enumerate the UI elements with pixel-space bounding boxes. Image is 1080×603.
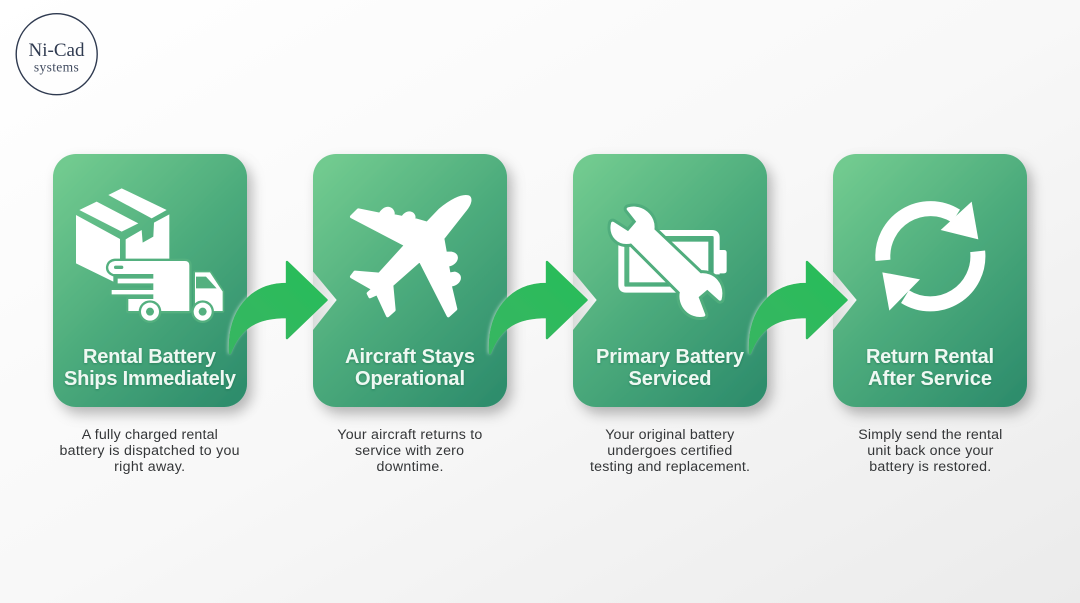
- text block: step 3 description: undergoes certified: [607, 443, 732, 459]
- panel: step 4 return rental after service: [833, 154, 1027, 407]
- text block: step 1 description: battery is dispatched to you: [60, 443, 240, 459]
- arrow: step 1 to step 2: [230, 262, 337, 353]
- text block: step 1 description: right away.: [114, 459, 185, 475]
- text block: step 2 description: downtime.: [376, 459, 444, 475]
- heading: step 3: Primary Battery: [596, 346, 745, 368]
- heading: step 3: Serviced: [628, 368, 712, 390]
- heading: step 2: Aircraft Stays: [345, 346, 475, 368]
- panel: step 3 primary battery serviced: [573, 154, 767, 407]
- heading: step 4: After Service: [868, 368, 992, 390]
- text block: step 3 description: Your original battery: [605, 427, 735, 443]
- arrow: step 3 to step 4: [750, 262, 857, 353]
- heading: step 1: Rental Battery: [83, 346, 217, 368]
- heading: step 4: Return Rental: [866, 346, 994, 368]
- panel: step 2 aircraft stays operational: [313, 154, 507, 407]
- icon: circular return arrows: [882, 202, 978, 311]
- heading: step 2: Operational: [355, 368, 465, 390]
- text block: step 4 description: Simply send the rental: [858, 427, 1002, 443]
- logo: Ni-Cad systems: systems: [34, 60, 79, 74]
- text block: step 3 description: testing and replacement.: [590, 459, 750, 475]
- logo: Ni-Cad systems: Ni-Cad: [29, 40, 85, 61]
- arrow: step 2 to step 3: [490, 262, 597, 353]
- heading: step 1: Ships Immediately: [64, 368, 237, 390]
- text block: step 2 description: Your aircraft returns to: [337, 427, 482, 443]
- icon: wrench over battery: [612, 208, 727, 315]
- text block: step 1 description: A fully charged rental: [82, 427, 218, 443]
- text block: step 4 description: unit back once your: [867, 443, 994, 459]
- icon: airplane: [352, 197, 470, 316]
- icon: box and delivery truck: [76, 188, 223, 323]
- logo: Ni-Cad systems: [16, 14, 97, 95]
- text block: step 2 description: service with zero: [355, 443, 464, 459]
- panel: step 1 rental battery ships: [53, 154, 247, 407]
- text block: step 4 description: battery is restored.: [869, 459, 991, 475]
